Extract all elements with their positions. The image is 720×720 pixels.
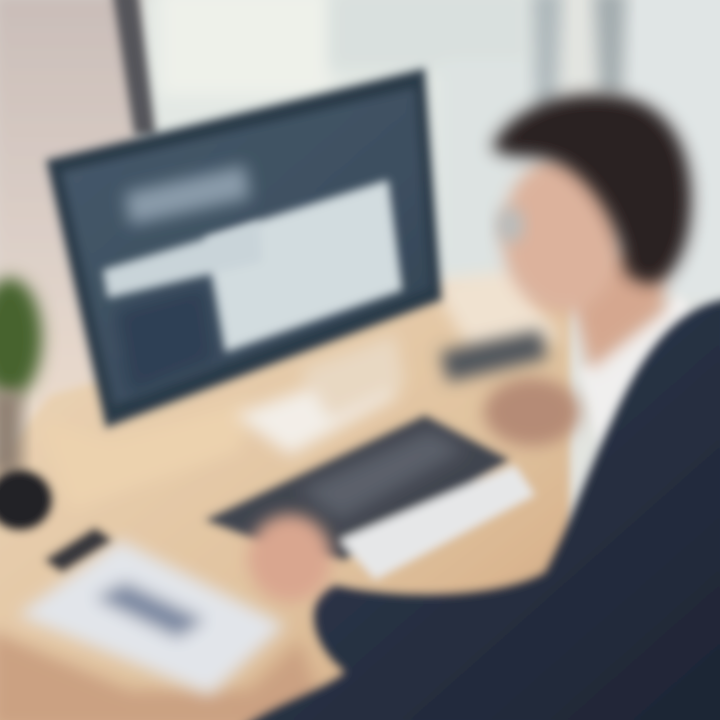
raised hand xyxy=(484,378,580,446)
person xyxy=(240,94,720,720)
monitor frame xyxy=(46,68,442,428)
keyboard xyxy=(205,415,535,580)
screen white strip xyxy=(103,222,262,298)
paper on desk xyxy=(18,540,285,695)
shirt collar xyxy=(580,295,710,450)
face xyxy=(502,157,622,313)
glasses xyxy=(496,207,524,243)
desk xyxy=(0,270,570,720)
hair xyxy=(492,94,691,284)
phone xyxy=(440,330,548,382)
paper text block xyxy=(95,582,205,638)
plant and pot xyxy=(0,278,52,530)
monitor xyxy=(46,68,442,428)
lower hand xyxy=(248,514,332,602)
jacket xyxy=(240,298,720,720)
screen dark lower block xyxy=(115,285,215,395)
monitor screen xyxy=(62,88,430,405)
screen white panel xyxy=(205,180,402,352)
screen heading block xyxy=(125,165,250,225)
neck xyxy=(565,240,665,370)
monitor stand xyxy=(235,335,405,455)
small dark object on desk xyxy=(45,528,112,572)
